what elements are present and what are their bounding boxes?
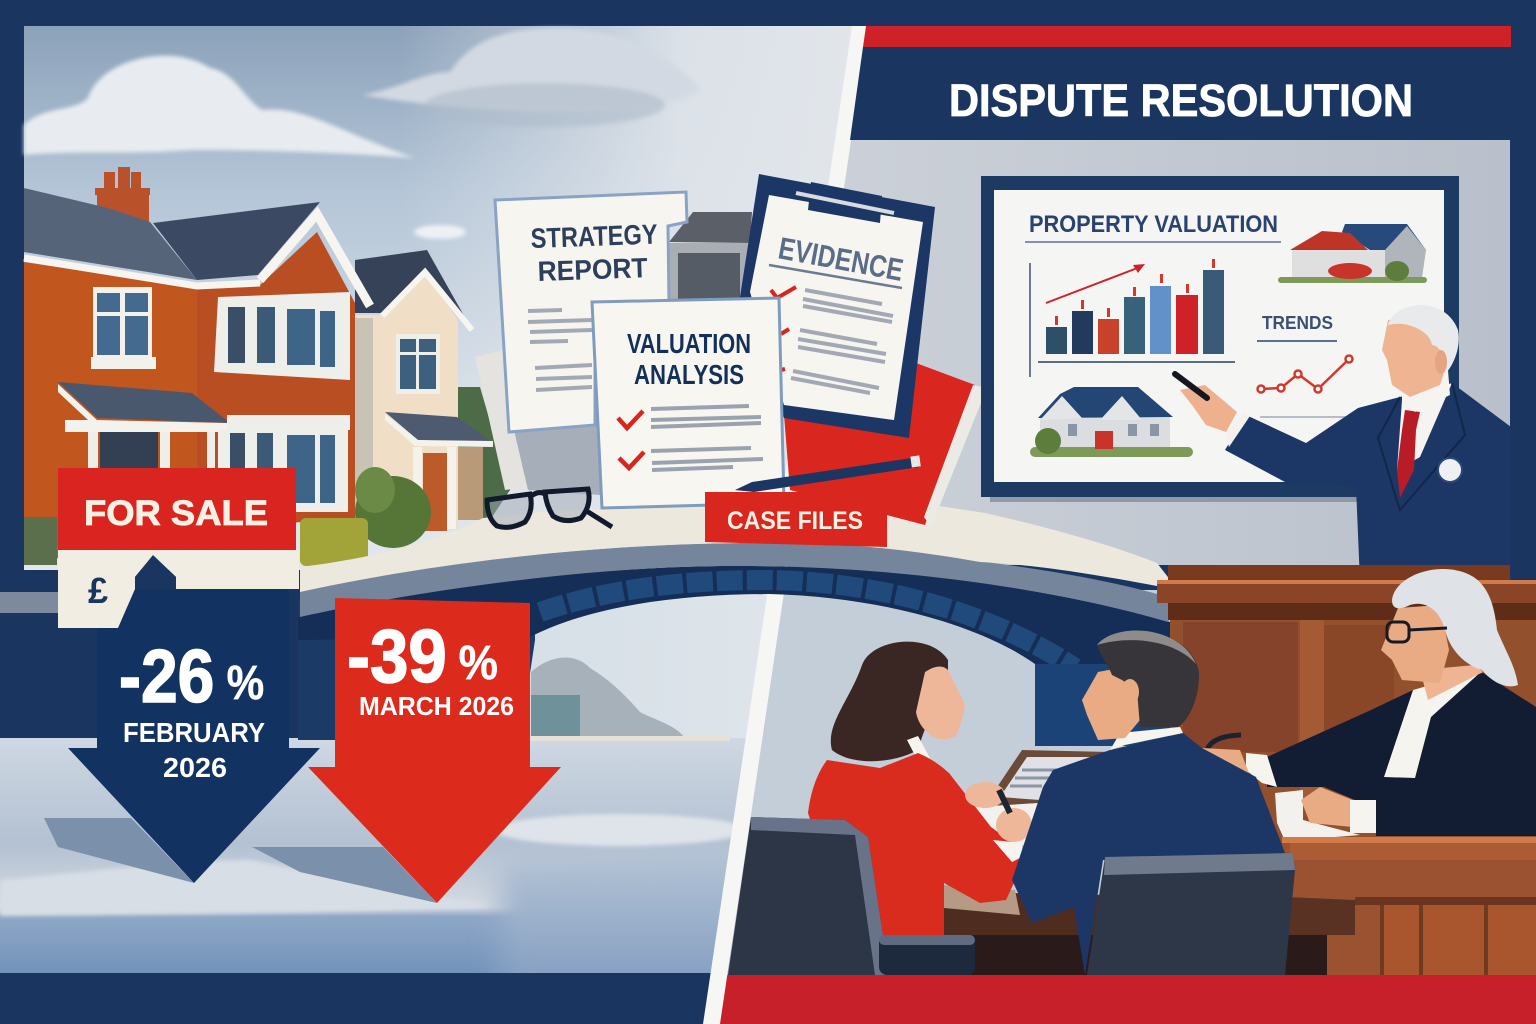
face	[1381, 605, 1449, 683]
strategy report: STRATEGY	[530, 219, 658, 254]
bar chart	[1029, 259, 1235, 377]
cream deck	[300, 500, 1178, 592]
bushes	[24, 467, 431, 566]
courtroom table	[944, 750, 1355, 975]
grey shadow under report	[514, 425, 600, 495]
value: %	[459, 635, 498, 689]
hand one	[1202, 748, 1249, 773]
arrow shadow right	[252, 847, 437, 903]
sign red header	[58, 468, 296, 550]
water	[0, 738, 760, 973]
left navy foreground block	[0, 570, 300, 742]
downstairs bay window	[218, 415, 350, 512]
clipboard evidence: EVIDENCE	[776, 230, 906, 288]
upstairs window	[91, 287, 156, 369]
pen	[999, 790, 1010, 813]
head	[1382, 315, 1452, 397]
cuff two	[1350, 800, 1376, 833]
board shadow	[990, 497, 1360, 502]
clip	[796, 182, 894, 223]
suit	[1225, 383, 1511, 582]
arch stones	[540, 580, 1075, 668]
collar	[907, 736, 930, 765]
label month: FEBRUARY	[123, 717, 265, 748]
bridge	[298, 500, 1178, 746]
clipboard evidence	[740, 174, 935, 438]
header band	[850, 26, 1511, 140]
pound icon: £	[88, 570, 108, 611]
distant trees	[531, 657, 684, 737]
face	[1082, 665, 1140, 740]
navy arrow -26%	[68, 589, 320, 883]
clouds	[24, 28, 700, 239]
valuation analysis: VALUATION	[627, 328, 751, 359]
sign board	[58, 550, 299, 628]
right wall	[790, 140, 1510, 565]
front desk	[1282, 837, 1536, 975]
red arrow -39%	[308, 598, 561, 903]
cream house wall	[355, 272, 458, 530]
glasses	[1387, 622, 1447, 642]
hands	[965, 782, 1032, 842]
trends label: TRENDS	[1262, 313, 1333, 333]
right lower background	[728, 590, 1175, 975]
left eave	[24, 258, 260, 286]
navy pier behind arrows	[298, 600, 535, 740]
case files label: CASE FILES	[727, 507, 863, 535]
jacket	[1012, 733, 1285, 975]
cuff	[1225, 413, 1250, 447]
trend line	[1258, 356, 1352, 392]
tree behind houses	[458, 387, 510, 520]
presenter	[1175, 305, 1511, 582]
documents stack	[475, 174, 987, 547]
hair	[1097, 631, 1199, 727]
collar	[1110, 727, 1183, 750]
shoreline	[530, 736, 730, 741]
porch roof	[58, 382, 230, 472]
presentation board	[981, 176, 1459, 497]
sign text: FOR SALE	[84, 494, 268, 533]
cream house roof	[355, 250, 472, 330]
chimney	[95, 167, 150, 235]
tie	[1397, 410, 1420, 498]
bottom band right	[718, 975, 1536, 1024]
neck	[1420, 665, 1483, 700]
label year: 2026	[163, 752, 227, 783]
cream porch	[385, 412, 493, 531]
water right tone	[500, 845, 760, 1000]
microphone	[1207, 735, 1241, 750]
pale sky right side	[400, 26, 868, 570]
man in navy	[1012, 631, 1285, 975]
collar bands	[1384, 670, 1483, 778]
judge	[1202, 569, 1536, 841]
neck and collar	[1402, 370, 1450, 412]
left roof	[24, 188, 197, 280]
ear	[1121, 679, 1139, 705]
grey band	[300, 543, 1178, 622]
wig	[1392, 569, 1518, 686]
diagonal divider	[703, 26, 868, 1024]
value: %	[227, 655, 264, 710]
value: -26	[119, 634, 214, 718]
upstairs bay window	[214, 292, 350, 380]
pen	[735, 455, 921, 492]
woman in red	[808, 642, 1032, 975]
shirt	[1397, 383, 1452, 470]
hair	[831, 642, 948, 761]
label: MARCH 2026	[359, 691, 514, 721]
robe	[1267, 673, 1536, 836]
face	[916, 666, 965, 739]
trend arrow	[1046, 267, 1140, 303]
white papers	[975, 803, 1038, 850]
blue panel below arch	[1035, 664, 1170, 746]
tablet on table	[985, 750, 1110, 808]
ear	[1435, 350, 1447, 374]
panel: left property scene	[0, 26, 868, 1000]
hand	[1180, 385, 1237, 432]
cream side extension	[458, 447, 483, 520]
badge	[1438, 458, 1462, 482]
glasses	[487, 489, 612, 527]
arrow shadow left	[44, 818, 194, 883]
marker	[1175, 374, 1207, 398]
hair	[1388, 305, 1459, 375]
water highlight	[495, 814, 745, 846]
houses	[24, 167, 510, 566]
valuation analysis: ANALYSIS	[634, 359, 744, 390]
cream house window	[396, 334, 440, 394]
bottom band left	[0, 973, 712, 1024]
navy arch band	[298, 566, 1170, 690]
cuff one	[1246, 753, 1277, 787]
folder	[668, 212, 752, 301]
strategy report: REPORT	[537, 252, 648, 287]
for sale sign	[58, 468, 299, 628]
gable trim	[260, 214, 370, 306]
value: -39	[347, 615, 447, 699]
foreground chair right	[1087, 853, 1295, 975]
board heading: PROPERTY VALUATION	[1029, 211, 1278, 238]
table end in front of desk	[1285, 897, 1355, 935]
jacket	[808, 753, 1022, 975]
cream house shadow side	[355, 318, 373, 530]
bay brick wall	[197, 232, 355, 530]
sign notch	[135, 555, 176, 590]
red book	[784, 363, 987, 527]
main brick wall	[24, 262, 197, 565]
valuation analysis	[592, 298, 784, 508]
grey bridge side band	[0, 592, 60, 613]
paper under hands	[1275, 790, 1360, 841]
strategy report	[495, 192, 687, 432]
small house bottom	[1030, 387, 1193, 457]
lapel lines	[1378, 383, 1465, 510]
hand two	[1301, 787, 1353, 827]
bar markers	[1055, 259, 1215, 325]
case files label	[705, 492, 887, 547]
judge bench	[1157, 565, 1536, 850]
title: DISPUTE RESOLUTION	[949, 75, 1413, 126]
pale back sheet	[475, 350, 527, 490]
bridge opening sky	[24, 570, 800, 745]
hair highlight	[1097, 631, 1196, 664]
cuff	[993, 840, 1022, 862]
middle roof	[153, 202, 320, 280]
distant building	[531, 695, 580, 737]
foreground chair left	[728, 817, 975, 975]
small house top	[1278, 224, 1427, 283]
light streak	[0, 860, 490, 916]
